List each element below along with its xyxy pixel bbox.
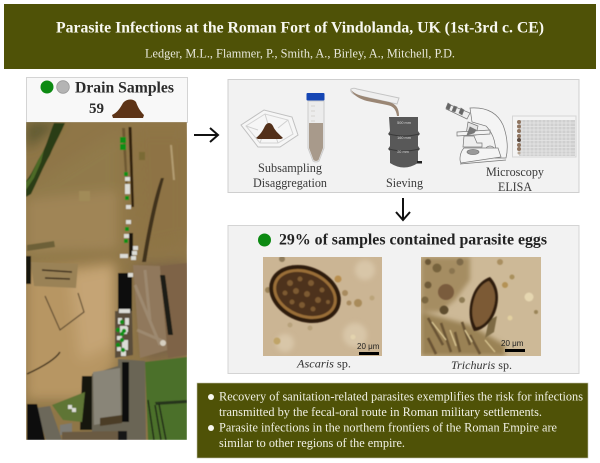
- bullet 1: [208, 390, 583, 419]
- bullet 2: [208, 420, 557, 450]
- process labels: Microscopy: [486, 165, 545, 179]
- icon: sieve stack: 160 mm: [397, 136, 411, 140]
- process labels: Subsampling: [258, 161, 323, 175]
- bullet 1: Recovery of sanitation-related parasites exemplifies the risk for infections: [219, 390, 583, 404]
- icon: centrifuge tube: [306, 93, 324, 162]
- authors: Ledger, M.L., Flammer, P., Smith, A., Birley, A., Mitchell, P.D.: [145, 46, 455, 60]
- bullet 1: transmitted by the fecal-oral route in Roman military settlements.: [219, 405, 542, 419]
- ruin walls: [26, 256, 31, 284]
- process labels: Disaggregation: [253, 176, 328, 190]
- icon: soil pile: [112, 99, 144, 118]
- results heading: 29% of samples contained parasite eggs: [279, 232, 547, 248]
- aerial site map with sample points: [26, 122, 187, 440]
- top-left hedge: [26, 123, 65, 197]
- sample markers: [68, 137, 138, 412]
- icon: green positive sample dot: [40, 80, 54, 94]
- micrograph: Ascaris egg: [260, 255, 382, 356]
- icon: weigh boat with soil: [241, 110, 298, 147]
- title: Parasite Infections at the Roman Fort of Vindolanda, UK (1st-3rd c. CE): [56, 20, 544, 36]
- panel: results: [228, 226, 579, 374]
- grass field: [145, 357, 187, 440]
- legend heading: Drain Samples: [75, 80, 174, 96]
- drain trench: [129, 233, 133, 257]
- icon: microscope: [446, 103, 507, 164]
- arrow: processing to results: [396, 198, 410, 220]
- micrograph: Trichuris egg: [421, 257, 541, 356]
- icon: pouring tube: [351, 88, 399, 116]
- caption: Ascaris: Ascaris sp.: [296, 356, 351, 370]
- process labels: [253, 161, 545, 194]
- bullet 2: similar to other regions of the empire.: [219, 436, 405, 450]
- header banner: [4, 4, 596, 69]
- process labels: ELISA: [498, 180, 532, 194]
- arrow: samples to processing: [194, 128, 218, 142]
- panel: drain samples legend: [26, 78, 188, 122]
- icon: sieve stack: [388, 117, 422, 168]
- caption: Trichuris: Trichuris sp.: [451, 358, 512, 372]
- icon: gray negative sample dot: [57, 81, 69, 93]
- scale label: 20 μm: [357, 342, 380, 351]
- panel: conclusions: [197, 383, 588, 458]
- process labels: Sieving: [386, 176, 424, 190]
- stone building: [92, 359, 146, 440]
- icon: sieve stack: 20 mm: [397, 150, 409, 154]
- panel: laboratory processing: [228, 80, 579, 194]
- icon: sieve stack: 500 mm: [397, 121, 411, 125]
- icon: green positive dot: [258, 234, 271, 246]
- scale label: 20 μm: [501, 339, 524, 348]
- bullet 2: Parasite infections in the northern frontiers of the Roman Empire are: [219, 420, 557, 434]
- sample count: 59: [89, 101, 104, 117]
- icon: ELISA plate: [512, 116, 576, 157]
